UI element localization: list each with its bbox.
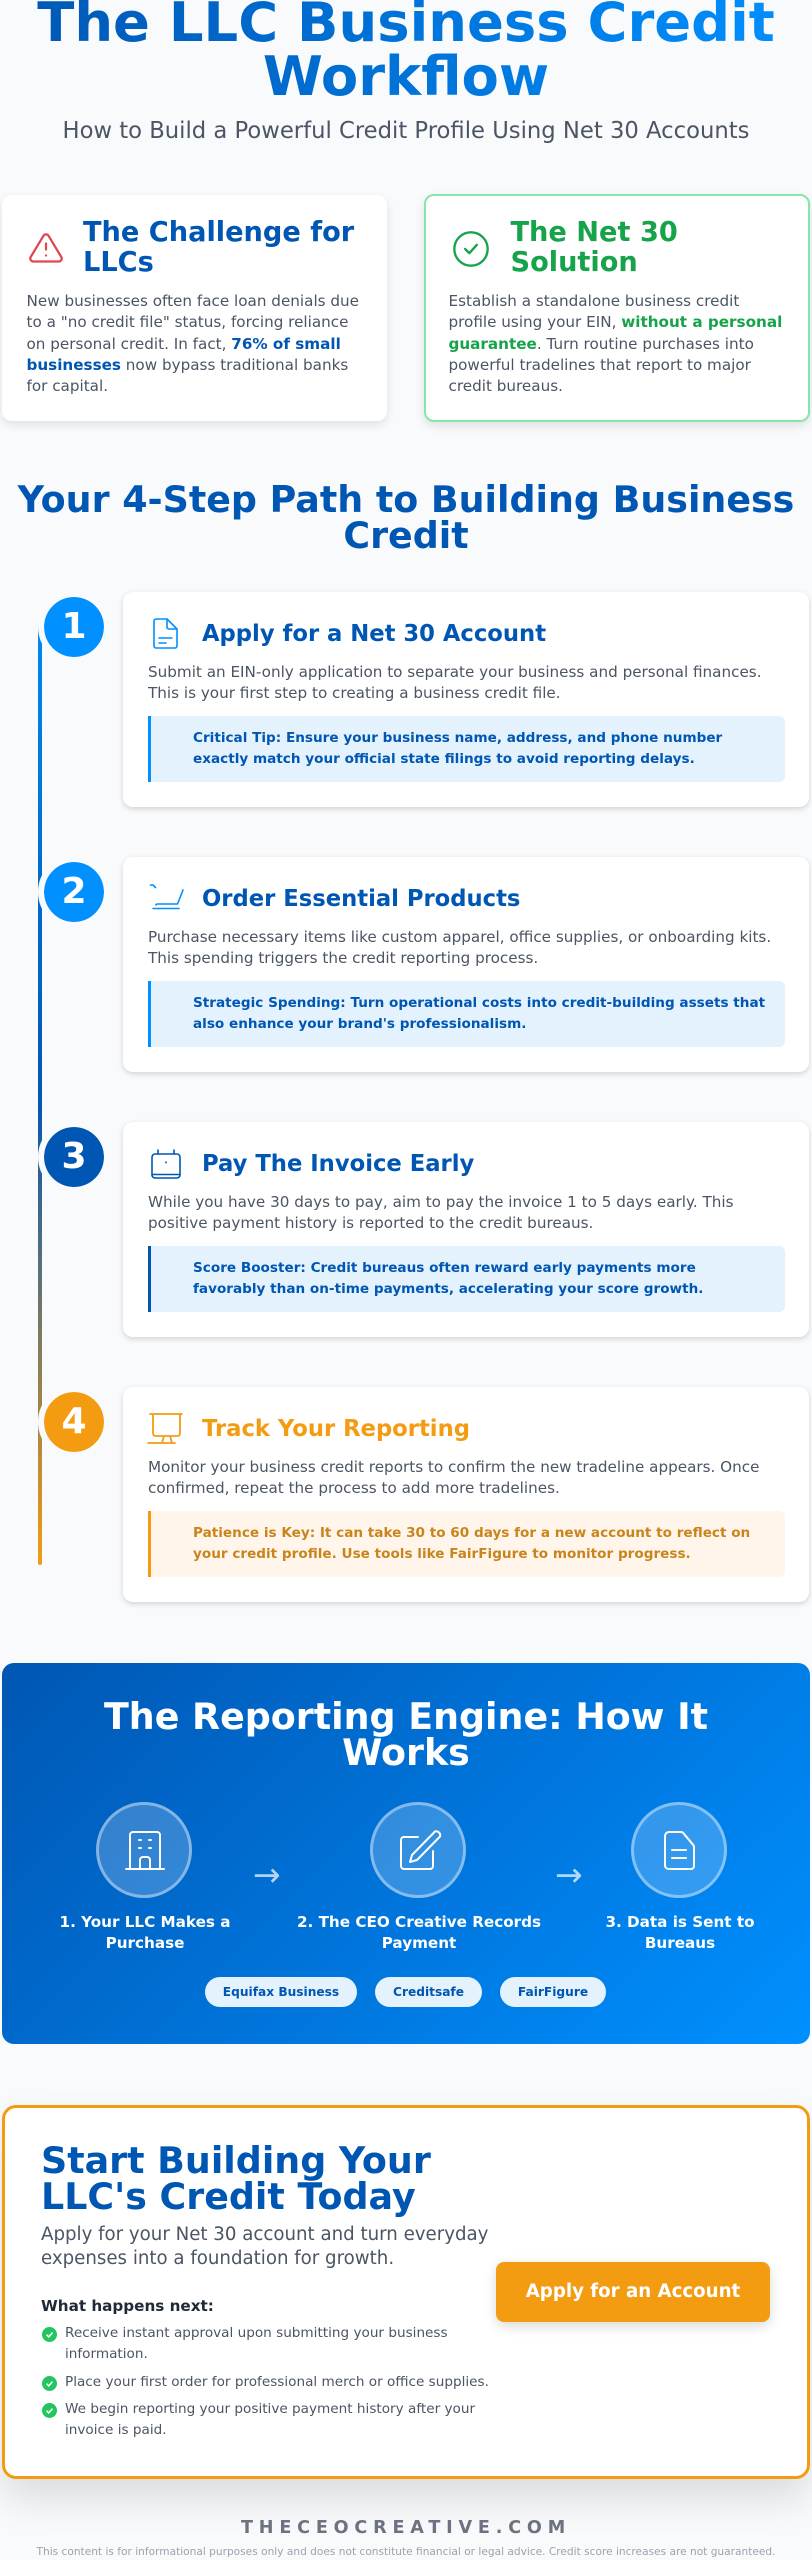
heading: The Reporting Engine: How It (104, 1694, 708, 1738)
step title: Order Essential Products (202, 886, 520, 912)
panel: call to action (2, 2105, 810, 2479)
check 3 (42, 2403, 57, 2418)
heading: The Net 30 (510, 216, 678, 248)
check 2 (42, 2376, 57, 2391)
step description: positive payment history is reported to the credit bureaus. (148, 1214, 593, 1232)
button: apply: Apply for an Account (526, 2281, 740, 2302)
icon: warning triangle (29, 233, 63, 263)
list item 1: Receive instant approval upon submitting your business (65, 2325, 448, 2341)
list item 3: invoice is paid. (65, 2422, 167, 2438)
icon: pencil square (370, 1802, 466, 1898)
body text: businesses now bypass traditional banks (26, 356, 348, 374)
panel: step 4 (123, 1387, 809, 1602)
arrow: → (253, 1855, 281, 1894)
cta heading: Start Building Your (41, 2138, 431, 2182)
callout: score booster: favorably than on-time payments, accelerating your score growth. (193, 1281, 703, 1297)
body text (448, 292, 782, 395)
panel: step 1 (123, 592, 809, 807)
callout: critical tip: Critical Tip: Ensure your business name, address, and phone number (193, 730, 722, 746)
callout: score booster: Score Booster: Credit bureaus often reward early payments more (193, 1260, 696, 1276)
panel: step 3 (123, 1122, 809, 1337)
icon: building (96, 1802, 192, 1898)
check 1 (42, 2327, 57, 2342)
label 2 (297, 1913, 541, 1952)
body text: Establish a standalone business credit (448, 292, 739, 310)
section heading: 4-step path: Your 4-Step Path to Building Business (18, 478, 794, 520)
label 3: Bureaus (645, 1934, 715, 1952)
pill: creditsafe: Creditsafe (393, 1985, 464, 1999)
callout: strategic spending: also enhance your brand's professionalism. (193, 1016, 526, 1032)
label 1: Purchase (106, 1934, 184, 1952)
icon: document (631, 1802, 727, 1898)
icon: check circle (453, 231, 489, 267)
list item 2: Place your first order for professional merch or office supplies. (65, 2374, 489, 2390)
cta subtext (41, 2224, 488, 2268)
step 3 number: 3 (61, 1136, 87, 1177)
label 1 (60, 1913, 230, 1952)
panel: reporting engine (2, 1663, 810, 2044)
list item 3: We begin reporting your positive payment history after your (65, 2400, 475, 2416)
step 1 number (38, 591, 110, 663)
label 1: 1. Your LLC Makes a (60, 1913, 230, 1931)
step description: This is your first step to creating a business credit file. (148, 684, 561, 702)
body text (26, 292, 359, 395)
list item 1: information. (65, 2346, 148, 2362)
pill: fairfigure (500, 1977, 606, 2007)
footer brand: THECEOCREATIVE.COM (241, 2518, 571, 2538)
body text: New businesses often face loan denials due (26, 292, 359, 310)
step description (148, 1193, 734, 1232)
section heading: 4-step path: Credit (343, 514, 469, 557)
step 2 number (38, 856, 110, 928)
callout: strategic spending (148, 981, 785, 1047)
cta subtext: Apply for your Net 30 account and turn everyday (41, 2224, 488, 2244)
panel: the net 30 solution (424, 194, 810, 422)
cta subtext: expenses into a foundation for growth. (41, 2248, 394, 2268)
callout: patience is key: Patience is Key: It can take 30 to 60 days for a new account to reflect on (193, 1525, 750, 1541)
heading: Solution (510, 246, 638, 278)
callout: patience is key: your credit profile. Use tools like FairFigure to monitor progress. (193, 1546, 691, 1562)
pill: equifax: Equifax Business (223, 1985, 339, 1999)
callout: patience is key (148, 1511, 785, 1577)
cta heading (41, 2138, 431, 2218)
step 4 number: 4 (61, 1401, 87, 1442)
step description: While you have 30 days to pay, aim to pay the invoice 1 to 5 days early. This (148, 1193, 734, 1211)
step 3 number (38, 1121, 110, 1193)
body text: on personal credit. In fact, 76% of small (26, 335, 341, 353)
icon: shopping cart (150, 884, 184, 910)
button: apply (496, 2262, 770, 2322)
arrow: → (555, 1855, 583, 1894)
step description: This spending triggers the credit reporting process. (148, 949, 538, 967)
pill: creditsafe (375, 1977, 482, 2007)
icon: presentation board (147, 1413, 183, 1444)
body text: guarantee. Turn routine purchases into (448, 335, 754, 353)
label 2: Payment (382, 1934, 456, 1952)
body text: credit bureaus. (448, 377, 563, 395)
subtitle: How to Build a Powerful Credit Profile Using Net 30 Accounts (63, 118, 749, 144)
step description (148, 928, 771, 967)
list item 3 (65, 2400, 476, 2438)
step 4 number (38, 1386, 110, 1458)
body text: for capital. (26, 377, 108, 395)
callout: critical tip (148, 716, 785, 782)
callout: strategic spending: Strategic Spending: Turn operational costs into credit-building assets that (193, 995, 765, 1011)
what happens next: What happens next: (41, 2297, 214, 2315)
heading (83, 216, 354, 278)
step description (148, 663, 762, 702)
label 3: 3. Data is Sent to (605, 1913, 755, 1931)
body text: profile using your EIN, without a personal (448, 313, 782, 331)
icon: calendar (151, 1149, 181, 1179)
list item 1 (65, 2325, 448, 2362)
body text: powerful tradelines that report to major (448, 356, 751, 374)
label 2: 2. The CEO Creative Records (297, 1913, 541, 1931)
pill: fairfigure: FairFigure (518, 1985, 588, 1999)
heading: LLCs (83, 246, 154, 278)
step title: Track Your Reporting (202, 1416, 470, 1442)
label 3 (605, 1913, 755, 1952)
heading (510, 216, 678, 278)
pill: equifax (205, 1977, 357, 2007)
heading: Works (342, 1731, 470, 1774)
callout: score booster (148, 1246, 785, 1312)
step description: Purchase necessary items like custom apparel, office supplies, or onboarding kits. (148, 928, 771, 946)
panel: step 2 (123, 857, 809, 1072)
step description: Monitor your business credit reports to confirm the new tradeline appears. Once (148, 1458, 759, 1476)
callout: critical tip: exactly match your official state filings to avoid reporting delays. (193, 751, 695, 767)
step 1 number: 1 (61, 606, 87, 647)
section heading: 4-step path (17, 478, 794, 557)
heading: The Challenge for (83, 216, 354, 248)
footer disclaimer: This content is for informational purposes only and does not constitute financial or legal advice. Credit score increases are not guaranteed. (37, 2546, 775, 2558)
step title: Apply for a Net 30 Account (202, 621, 546, 647)
step description: Submit an EIN-only application to separate your business and personal finances. (148, 663, 762, 681)
icon: document (153, 618, 178, 649)
title: Workflow (263, 45, 549, 108)
cta heading: LLC's Credit Today (41, 2175, 416, 2218)
step title: Pay The Invoice Early (202, 1151, 474, 1177)
heading (104, 1694, 708, 1774)
step description (148, 1458, 759, 1497)
timeline line (38, 625, 42, 1565)
panel: the challenge (2, 195, 387, 421)
body text: to a "no credit file" status, forcing reliance (26, 313, 348, 331)
step 2 number: 2 (61, 871, 87, 912)
step description: confirmed, repeat the process to add more tradelines. (148, 1479, 560, 1497)
title (0, 0, 812, 104)
